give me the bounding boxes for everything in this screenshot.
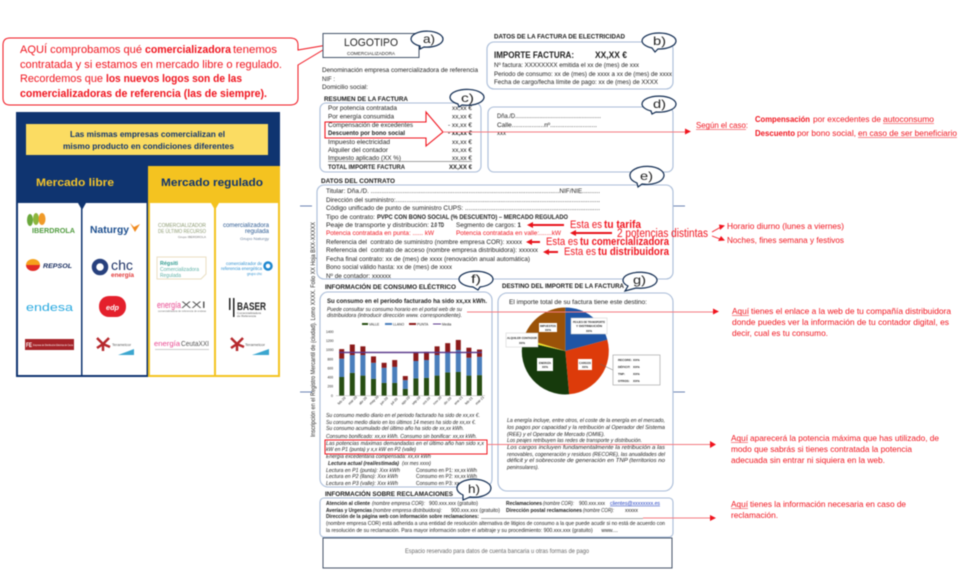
logo: CUR Iberdrola: DE ÚLTIMO RECURSO	[158, 228, 206, 235]
note: segun el caso: por bono social,	[797, 129, 856, 138]
panel c: resumen de la factura: Compensación de excedentes	[328, 122, 413, 129]
bar chart: consumo: jul-20	[389, 397, 399, 406]
bubble g: g)	[633, 273, 646, 287]
bar chart: consumo: jun-20	[379, 396, 389, 406]
note: enlace web: decir, cual es tu consumo.	[732, 329, 828, 338]
logo: chc energia	[94, 257, 135, 279]
bubble f	[459, 271, 493, 290]
panel e: datos del contrato: Bono social válido hasta: xx de (mes) de xxxx	[326, 265, 452, 271]
panel h: informacion sobre reclamaciones: (nombre COR):	[543, 501, 574, 507]
text block: explicacion destino: Los cargos incluyen fundamentalmente la retribución a las	[507, 445, 665, 451]
panel h: informacion sobre reclamaciones: Dirección de la página web con información sobre reclamaciones:	[326, 514, 479, 520]
bar chart: consumo: 1200	[326, 339, 334, 343]
logo: Iberdrola	[27, 213, 75, 235]
arrow: reclamacion	[643, 515, 716, 521]
box: espacio reservado	[323, 538, 672, 568]
pie label: energia: XX%	[542, 365, 548, 369]
bar chart: consumo	[326, 322, 485, 406]
panel c: resumen de la factura: xx,xx €	[452, 155, 472, 162]
bubble h: h)	[468, 482, 480, 496]
pie label: peajes: PEAJES DE TRANSPORTE	[573, 320, 605, 324]
logo: energia XXI: XXI	[181, 300, 206, 310]
note: tu distribuidora: Esta es	[564, 246, 596, 258]
panel f: informacion de consumo electrico: Su consumo en el periodo facturado ha sido xx,xx kWh.	[327, 298, 487, 305]
consumption detail text: Lectura en P3 (valle): Xxx kWh	[326, 481, 398, 487]
panel c: resumen de la factura: XX,XX €	[449, 164, 472, 171]
chart legend: LLANO	[393, 322, 404, 326]
note: potencia maxima: modo que sabrás si tienes contratada la potencia	[731, 445, 912, 454]
consumption detail text: Consumo en P1: xx,xx kWh	[416, 468, 477, 474]
arrow: tu comercializadora	[526, 239, 540, 245]
panel h: informacion sobre reclamaciones: (nombre empresa distribuidora):	[373, 508, 442, 514]
note: tu distribuidora: tu distribuidora	[598, 246, 670, 258]
logo: empresa de distribucion electrica de Ceuta	[25, 339, 74, 350]
panel c: resumen de la factura: xx,xx €	[452, 147, 472, 154]
callout: comercializadora note: comercializadora	[145, 44, 232, 56]
panel e: datos del contrato: Segmento de cargos: 1	[456, 223, 522, 229]
vertical registry text: Inscripción en el Registro Mercantil de (ciudad). Lomo XXXX. Folio XX Hoja BXX-XXXXX	[311, 222, 317, 437]
note: segun el caso: en caso de ser beneficiario	[858, 129, 957, 138]
panel e: datos del contrato: Potencia contratada en valle:.......kW	[456, 231, 561, 237]
panel h: informacion sobre reclamaciones: Atención al cliente	[326, 501, 370, 507]
panel e: datos del contrato: 2.0 TD	[431, 223, 444, 229]
panel g: destino del importe	[498, 283, 673, 491]
note: enlace web: tienes el enlace a la web de tu compañía distribuidora	[751, 307, 951, 316]
text block: explicacion destino: peninsulares).	[506, 465, 539, 471]
stubs	[300, 206, 685, 392]
logo: CUR Iberdrola: Grupo IBERDROLA	[178, 235, 206, 239]
pie label: alquiler contador: ALQUILER CONTADOR	[507, 336, 538, 340]
panel h: informacion sobre reclamaciones: 900.xxx.xxx (gratuito)	[451, 508, 500, 514]
note: tu tarifa: Esta es	[570, 219, 602, 231]
note: enlace web: Aquí	[732, 307, 750, 316]
pie label: peajes: Y DISTRIBUCIÓN	[576, 323, 602, 328]
panel c: resumen de la factura: RESUMEN DE LA FACTURA	[324, 96, 408, 103]
panel h: informacion sobre reclamaciones: (nombre empresa COR):	[372, 501, 425, 507]
bubble c	[450, 89, 484, 107]
note: tu tarifa	[570, 219, 642, 231]
note: reclamacion	[731, 500, 906, 520]
logo: comercializadora regulada Naturgy: regulada	[245, 228, 269, 235]
logo: energia XXI	[157, 300, 206, 313]
logo: comercializadora regulada Naturgy: Grupo Naturgy	[240, 236, 269, 241]
panel e: datos del contrato: Referencia del contrato de acceso (nombre empresa distribuidora): xxxxxx	[326, 248, 538, 254]
note: potencia maxima	[731, 434, 939, 465]
logo: Baser: de Referencia	[237, 314, 256, 318]
panel c: resumen de la factura: - xx,xx €	[448, 130, 472, 137]
panel h: informacion sobre reclamaciones: (nombre COR):	[583, 508, 614, 514]
chart legend: VALLE	[369, 322, 380, 326]
logo: comercializador de referencia energetica: comercializador de	[226, 261, 262, 266]
panel d: direccion	[488, 107, 673, 172]
logo: comercializadora regulada Naturgy: comercializadora	[223, 222, 269, 229]
arrow: 2 potencias	[570, 230, 612, 236]
note: segun el caso: Según el caso:	[696, 121, 748, 130]
panel b: datos de la factura	[487, 34, 673, 89]
logo: Regsiti: Regulada	[160, 273, 182, 279]
logo: comercializador de referencia energetica: referencia energética	[221, 266, 262, 271]
pie breakdown box: OTROS:	[618, 379, 630, 383]
panel c: resumen de la factura	[320, 96, 481, 172]
pie label: peajes	[571, 318, 607, 334]
callout: comercializadora note: tenemos	[233, 44, 278, 56]
logo: empresa de distribucion electrica de Ceuta: FE	[26, 343, 32, 349]
chart legend: PUNTA	[417, 322, 429, 326]
panel h: informacion sobre reclamaciones: Averías y Urgencias	[326, 508, 372, 514]
logo box	[323, 34, 419, 58]
panel b: datos de la factura: Fecha de cargo/fecha límite de pago: xx de (mes) de XXXX	[494, 79, 659, 86]
consumption detail text: Su consumo medio diario en los últimos 14 meses ha sido de xx,xx €.	[326, 420, 476, 426]
consumption detail text	[326, 413, 484, 487]
bar chart: consumo: ene-21	[453, 395, 464, 406]
bar chart: consumo: 400	[328, 376, 333, 380]
arrow: tu distribuidora	[543, 249, 558, 255]
pie label: alquiler contador: XX%	[519, 341, 525, 345]
arrow: enlace web	[467, 308, 719, 314]
company details: Denominación empresa comercializadora de referencia	[322, 67, 478, 74]
note: potencia maxima: aparecerá la potencia máxima que has utilizado, de	[750, 434, 939, 443]
pie label: impuestos	[539, 323, 557, 332]
bar chart: consumo: 1000	[326, 348, 334, 352]
panel b: datos de la factura: IMPORTE FACTURA:	[494, 50, 574, 61]
chart legend: Media	[442, 322, 451, 326]
note: horarios	[727, 222, 844, 245]
company details	[322, 67, 478, 91]
arrow: segun el caso	[443, 128, 691, 134]
bar chart: consumo: feb-20	[337, 396, 347, 406]
bubble d	[642, 96, 676, 114]
logo: chc energia: energía	[111, 273, 135, 279]
consumption detail text: Consumo en P3: xx,xx kWh	[416, 481, 477, 487]
banner: las mismas empresas: Las mismas empresas comercializan el	[70, 130, 225, 139]
heading: mercado regulado: Mercado regulado	[161, 177, 263, 189]
logo: Naturgy: Naturgy	[90, 225, 129, 236]
logo: comercializador de referencia energetica	[221, 261, 272, 276]
logo: comercializadora regulada Naturgy	[223, 222, 269, 241]
bar chart: consumo: 200	[328, 384, 333, 388]
panel h: informacion sobre reclamaciones: 900.xxx.xxx (gratuito)	[429, 501, 478, 507]
note: reclamacion: Aquí	[731, 500, 749, 509]
callout: comercializadora note: comercializadoras de referencia (las de siempre).	[20, 88, 267, 100]
bar chart: consumo: mar-21	[475, 395, 485, 406]
logo: edp	[99, 296, 126, 317]
note: segun el caso: autoconsumo	[883, 115, 934, 124]
panel h: informacion sobre reclamaciones: clientes@xxxxxxxx.es	[610, 501, 660, 507]
note: tu comercializadora	[546, 236, 670, 248]
panel e: datos del contrato: Potencia contratada en punta: ...... kW	[326, 231, 434, 237]
highlight: potencias maximas	[325, 440, 487, 454]
note: tu comercializadora: tu comercializadora	[580, 236, 670, 248]
panel f: informacion de consumo electrico: distribuidora (introducir dirección www. correspondiente).	[327, 313, 462, 319]
panel e: datos del contrato: Peaje de transporte y distribución:	[326, 223, 429, 229]
panel c: resumen de la factura: TOTAL IMPORTE FACTURA	[328, 164, 405, 171]
consumption detail text: Su consumo medio diario en el periodo facturado ha sido de xx,xx €.	[326, 413, 480, 419]
bubble h	[457, 479, 491, 500]
panel c: resumen de la factura: Por potencia contratada	[328, 105, 397, 112]
bar chart: consumo: abr-20	[358, 396, 368, 406]
bar chart: consumo: feb-21	[464, 396, 474, 406]
bar chart: consumo: 1400	[326, 330, 334, 334]
logo: comercializador de referencia energetica: grupo chc	[247, 272, 262, 276]
bubble g	[623, 272, 657, 291]
note: tu tarifa: tu tarifa	[604, 219, 642, 231]
consumption detail text: Consumo en P2: xx,xx kWh	[416, 474, 477, 480]
panel e: datos del contrato: Titular: Dña./D. ..........................................................................................................NIF/NIE..........	[326, 189, 600, 195]
bar chart: consumo: ago-20	[400, 395, 411, 406]
panel e: datos del contrato: Dirección del suministro:...................................................................................................................	[326, 198, 600, 204]
logo: Repsol: REPSOL	[43, 264, 72, 270]
pie label: impuestos: IMPUESTOS	[540, 324, 556, 328]
box: espacio reservado: Espacio reservado para datos de cuenta bancaria u otras formas de pago	[405, 549, 590, 555]
logo: Naturgy	[90, 223, 140, 236]
pie breakdown box: XX%	[633, 379, 640, 383]
panel h: informacion sobre reclamaciones: Dirección postal reclamaciones	[506, 508, 582, 514]
note: horarios: Horario diurno (lunes a viernes)	[727, 222, 844, 231]
panel d: direccion: Dña./D.....................................................	[497, 114, 601, 120]
logo: Repsol	[26, 259, 72, 271]
bar chart: consumo: may-20	[369, 395, 380, 406]
pie breakdown box: XX%	[633, 358, 640, 362]
bar chart: consumo: nov-20	[432, 395, 443, 406]
consumption detail text: Las potencias máximas demandadas en el último año han sido x,x	[326, 441, 484, 447]
panel b: datos de la factura: Nº factura: XXXXXXXX emitida el xx de (mes) de xxx	[494, 62, 640, 69]
consumption detail text: Consumo bonificado: xx,xx kWh. Consumo sin bonificar: xx,xx kWh.	[326, 434, 477, 440]
logo: Teramelcor regulado	[231, 338, 269, 355]
logo: Regsiti: Régsiti	[160, 261, 178, 267]
panel e: datos del contrato: Fecha final contrato: xx de (mes) de xxxx (renovación anual automática)	[326, 257, 530, 263]
logo: Baser: BASER	[237, 301, 266, 313]
note: tu comercializadora: Esta es	[546, 236, 578, 248]
panel h: informacion sobre reclamaciones: INFORMACIÓN SOBRE RECLAMACIONES	[325, 489, 454, 498]
bubble b: b)	[653, 34, 666, 48]
pie breakdown box: DÉFICIT:	[618, 364, 630, 369]
bubble b	[642, 33, 676, 52]
callout: comercializadora note: contratada y si estamos en mercado libre o regulado.	[20, 59, 282, 71]
panel: mercado libre y regulado	[16, 112, 280, 377]
note: reclamacion: reclamación.	[731, 511, 778, 520]
consumption detail text: Su consumo acumulado del último año ha sido de xx,xx kWh.	[326, 426, 464, 432]
panel c: resumen de la factura: Por energía consumida	[328, 114, 395, 120]
consumption detail text: (xx mes xxxx)	[402, 461, 431, 467]
pie label: cargos: CARGOS	[579, 361, 591, 365]
bar chart: consumo: mar-20	[347, 395, 358, 406]
logo: Baser: Comercializadora	[237, 311, 261, 315]
panel c: resumen de la factura: xx,xx €	[452, 114, 472, 120]
bar chart: consumo: sep-20	[411, 395, 421, 406]
bubble e: e)	[640, 169, 653, 183]
panel e: datos del contrato: Tipo de contrato:	[326, 215, 375, 221]
arrow: tu tarifa	[527, 222, 564, 228]
panel h: informacion sobre reclamaciones: xxxxx	[625, 508, 638, 514]
logo: endesa: endesa	[26, 302, 74, 314]
logo: energia XXI: comercializadora de referencia de endesa	[158, 309, 206, 313]
banner: las mismas empresas	[26, 124, 268, 155]
panel c: resumen de la factura: xx,xx €	[452, 139, 472, 146]
banner: las mismas empresas: mismo producto en condiciones diferentes	[63, 142, 235, 151]
panel h: informacion sobre reclamaciones: Reclamaciones	[506, 501, 542, 507]
panel e: datos del contrato	[317, 178, 673, 280]
logo box: COMERCIALIZADORA	[347, 51, 395, 56]
pie breakdown box: XX%	[633, 372, 640, 376]
pie breakdown box: XX%	[633, 365, 640, 369]
pie label: alquiler contador	[506, 333, 538, 347]
logo: edp: edp	[106, 305, 120, 312]
logo: chc energia: chc	[111, 257, 133, 273]
bar chart: consumo: 0	[331, 394, 333, 398]
pie label: cargos	[578, 359, 592, 370]
note: tu distribuidora	[564, 246, 670, 258]
panel h: informacion sobre reclamaciones: la resolución de su reclamación. Para mayor información sobre el arbitraje y su procedimiento: 900.xxx.xxx (gratuito) www....	[326, 528, 618, 534]
panel c: resumen de la factura: Impuesto aplicado (XX %)	[328, 155, 401, 162]
panel c: resumen de la factura: Descuento por bono social	[328, 130, 405, 137]
logo box: LOGOTIPO	[344, 37, 398, 49]
logo: Teramelcor libre	[97, 338, 134, 355]
logo: energia Ceuta XXI	[154, 339, 209, 350]
heading: mercado libre: Mercado libre	[36, 177, 114, 189]
panel h: informacion sobre reclamaciones: (nombre empresa COR) está adherida a una entidad de resolución alternativa de litigios de consumo a la que puede acudir si no está de acuerdo con	[326, 521, 665, 527]
bubble d: d)	[653, 97, 666, 111]
note: enlace web: donde puedes ver la información de tu contador digital, es	[732, 318, 949, 327]
panel c: resumen de la factura: Alquiler del contador	[328, 147, 388, 154]
panel c: resumen de la factura: - xx,xx €	[448, 122, 472, 129]
note: segun el caso: Descuento	[755, 129, 795, 138]
pie breakdown box: RECORE:	[618, 358, 632, 362]
logo: Iberdrola: IBERDROLA	[32, 228, 75, 235]
logo: Teramelcor regulado: Teramelcor	[245, 342, 266, 347]
logo: Regsiti: Comercializadora	[160, 267, 200, 273]
chart legend	[362, 322, 451, 326]
panel b: datos de la factura: XX,XX €	[595, 50, 628, 61]
arrow: potencia maxima	[487, 441, 716, 448]
panel e: datos del contrato: Código unificado de punto de suministro CUPS: ...........................................................................	[326, 206, 600, 212]
text block: explicacion destino: Los peajes retribuyen las redes de transporte y distribución.	[507, 438, 642, 444]
panel g: destino del importe: El importe total de su factura tiene este destino:	[509, 299, 647, 306]
consumption detail text: Lectura actual (real/estimada)	[328, 461, 399, 467]
logo: Teramelcor libre: Teramelcor	[112, 342, 132, 347]
note: segun el caso: por excedentes de	[813, 115, 881, 124]
note: 2 potencias distintas: 2 potencias distintas	[617, 228, 708, 240]
arrows: horarios	[712, 224, 725, 241]
bar chart: consumo: oct-20	[422, 396, 431, 406]
bubble a: a)	[423, 32, 435, 46]
callout: comercializadora note: Recordemos que	[20, 73, 103, 85]
header: mercado regulado background	[148, 166, 280, 377]
panel f: informacion de consumo electrico: Puede consultar su consumo horario en el portal web de su	[327, 307, 462, 313]
callout: comercializadora note: los nuevos logos son de las	[106, 73, 242, 85]
text block: explicacion destino: déficit y el sobrecoste de generación en TNP (territorios no	[507, 458, 665, 464]
logo: empresa de distribucion electrica de Ceuta: Empresa de Distribución Eléctrica de Ceuta	[33, 343, 73, 347]
text block: explicacion destino	[506, 418, 666, 471]
logo: CUR Iberdrola	[158, 223, 206, 239]
panel g: destino del importe: DESTINO DEL IMPORTE DE LA FACTURA	[502, 283, 624, 290]
bubble e	[630, 166, 664, 187]
note: potencia maxima: Aquí	[731, 434, 749, 443]
bubble c: c)	[461, 91, 474, 105]
pie label: energia: ENERGÍA	[539, 360, 552, 365]
pie chart: destino	[506, 308, 660, 394]
callout: comercializadora note: AQUÍ comprobamos qué	[20, 43, 142, 56]
note: reclamacion: tienes la información necesaria en caso de	[750, 500, 906, 509]
pie breakdown box	[613, 355, 660, 385]
pie breakdown box: TNP:	[618, 372, 625, 376]
bar chart: consumo: 600	[328, 366, 333, 370]
consumption detail text: Lectura en P1 (punta): Xxx kWh	[326, 468, 400, 474]
note: segun el caso: Compensación	[755, 115, 810, 124]
consumption detail text: Lectura en P2 (llano): Xxx kWh	[326, 474, 398, 480]
panel b: datos de la factura: DATOS DE LA FACTURA DE ELECTRICIDAD	[494, 34, 625, 40]
panel c: resumen de la factura: xx,xx €	[452, 105, 472, 112]
text block: explicacion destino: La energía incluye, entre otros, el coste de la energía en el mercado,	[507, 418, 665, 424]
company details: Domicilio social:	[322, 84, 368, 91]
bubble a	[411, 31, 443, 49]
panel d: direccion: xxx	[497, 131, 506, 137]
arrow: outline red	[325, 112, 443, 146]
panel b: datos de la factura: Periodo de consumo: xx de (mes) de xxxx a xx de (mes) de xxxx	[494, 71, 673, 78]
text block: explicacion destino: los pagos por capacidad y la retribución al Operador del Sistema	[507, 425, 665, 431]
panel f: informacion de consumo electrico: INFORMACIÓN DE CONSUMO ELÉCTRICO	[325, 282, 456, 291]
panel e: datos del contrato: PVPC CON BONO SOCIAL (% DESCUENTO) – MERCADO REGULADO	[377, 215, 568, 221]
logo: CUR Iberdrola: COMERCIALIZADOR	[158, 223, 206, 229]
pie label: impuestos: XX%	[545, 328, 551, 332]
note: potencia maxima: adecuada sin entrar ni siquiera en la web.	[731, 456, 885, 465]
panel d: direccion: Calle..................nº..........................	[497, 122, 597, 129]
panel f: informacion de consumo electrico	[320, 282, 492, 487]
text block: explicacion destino: renovables, cogeneración y residuos (RECORE), las anualidades del	[507, 452, 666, 458]
logo: energia Ceuta XXI: CeutaXXI	[181, 341, 209, 348]
callout: comercializadora note	[3, 38, 333, 105]
pie label: energia	[537, 358, 553, 371]
note: enlace web	[732, 307, 951, 338]
note: segun el caso	[696, 115, 957, 138]
panel e: datos del contrato: DATOS DEL CONTRATO	[321, 178, 395, 185]
logo: Baser	[229, 298, 266, 318]
bar chart: consumo: 800	[328, 358, 333, 362]
panel e: datos del contrato: Referencia del contrato de suministro (nombre empresa COR): xxxxx	[326, 240, 522, 246]
logo: energia Ceuta XXI: energía	[154, 339, 181, 348]
bar chart: consumo: dic-20	[443, 396, 452, 406]
company details: NIF :	[322, 76, 335, 83]
panel h: informacion sobre reclamaciones	[320, 489, 673, 537]
logo: energia XXI: energía	[157, 300, 181, 310]
panel c: resumen de la factura: Impuesto electricidad	[328, 139, 391, 146]
bubble f: f)	[471, 272, 481, 286]
consumption detail text: Energía excedentaria compensada: xx,xx kWh	[326, 454, 431, 460]
pie label: cargos: XX%	[582, 365, 588, 369]
text block: explicacion destino: (REE) y el Operador de Mercado (OMIE).	[507, 432, 605, 438]
panel e: datos del contrato: Nº de contador: xxxxxx	[326, 273, 391, 280]
panel h: informacion sobre reclamaciones: 900.xxx.xxx	[579, 501, 605, 507]
note: horarios: Noches, fines semana y festivos	[727, 236, 844, 245]
consumption detail text: kW en P1 (punta) y x,x kW en P2 (valle)	[326, 447, 416, 453]
pie label: peajes: XX%	[586, 329, 592, 333]
logo: Regsiti	[157, 257, 206, 279]
